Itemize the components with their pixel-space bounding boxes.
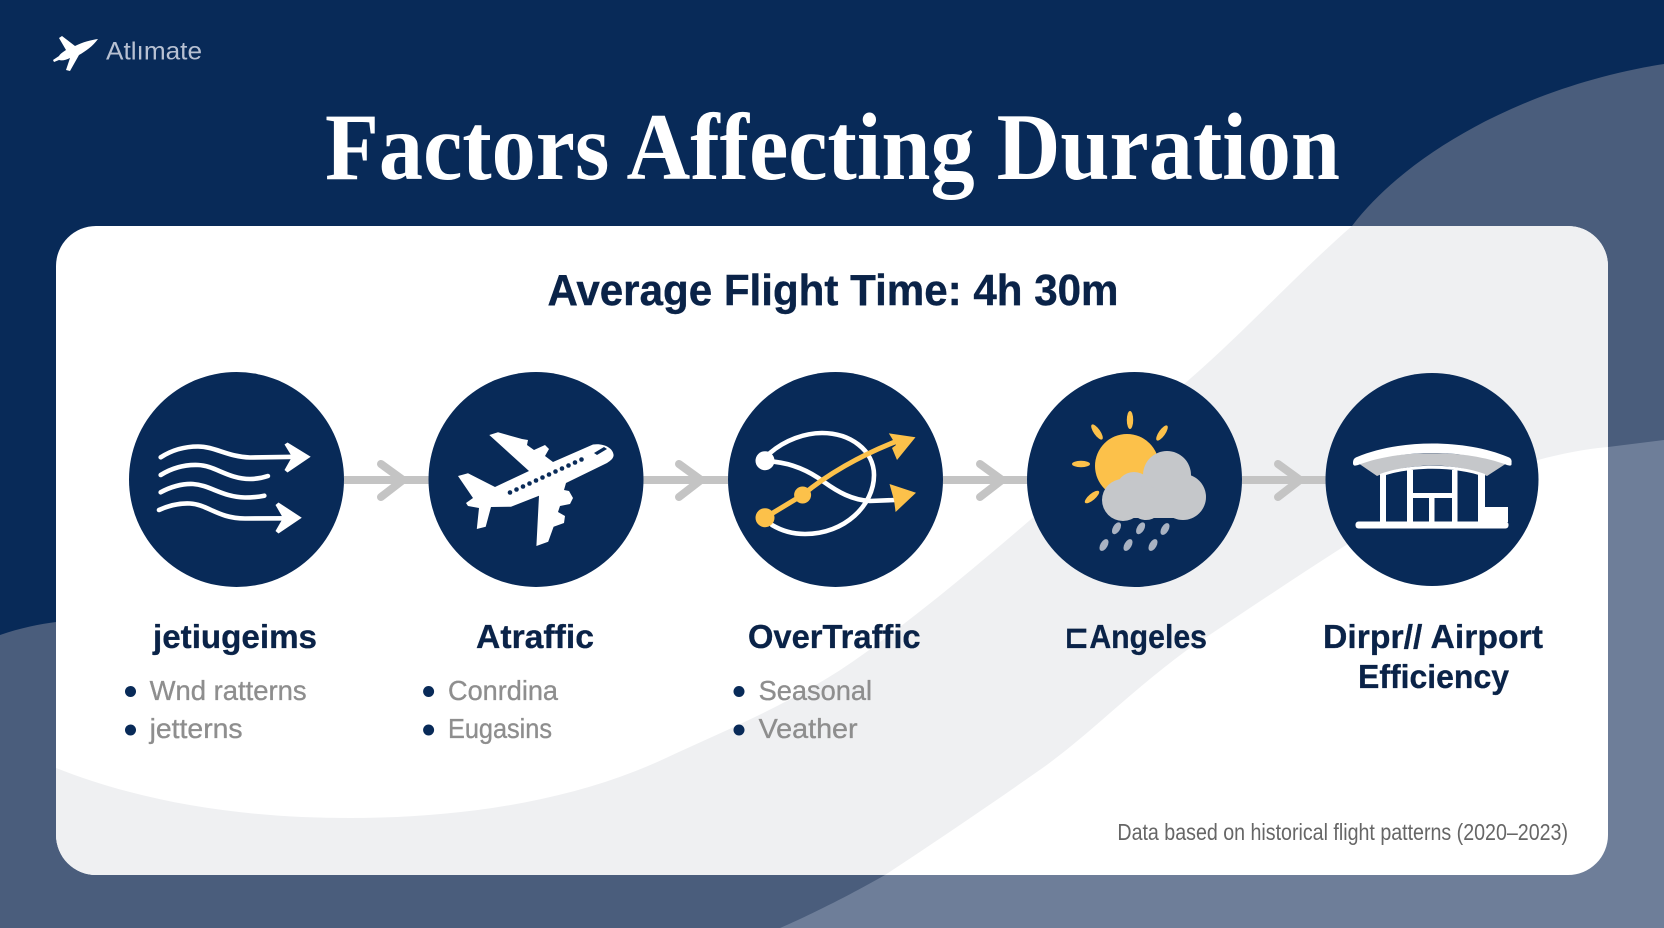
icon: routes circle (728, 372, 943, 587)
heading: column 1: jetiugeims (152, 618, 317, 655)
airplane windows (508, 447, 607, 495)
column 5: heading: Efficiency (1358, 658, 1510, 695)
bullet list: column 3 (734, 675, 872, 744)
bullet list: column 3: Veather (759, 713, 858, 744)
cloud (1102, 451, 1206, 521)
arrow: connector 2 (643, 464, 728, 497)
bullet list: column 2 (423, 675, 558, 744)
arrow: connector 3 (943, 464, 1028, 497)
icon: wind circle (129, 372, 344, 587)
arrow: connector 4 (1242, 464, 1327, 497)
panel: main card (56, 226, 1608, 875)
rain (1098, 521, 1171, 552)
icon: airport terminal circle (1326, 373, 1538, 586)
subtitle: average flight time: Average Flight Time: 4h 30m (548, 266, 1118, 315)
icon: airplane circle (428, 372, 644, 587)
icon: logo plane (53, 36, 98, 71)
bullet list: column 2: Conrdina (448, 675, 558, 706)
heading: column 3: OverTraffic (748, 618, 921, 655)
bullet list: column 1: jetterns (149, 713, 243, 744)
bullet list: column 2: Eugasins (448, 713, 552, 744)
title: Factors Affecting Duration (325, 94, 1340, 200)
column 5: heading (1323, 618, 1543, 695)
icon: weather circle (1027, 372, 1242, 587)
bullet list: column 3: Seasonal (759, 675, 872, 706)
arrow: connector 1 (344, 464, 429, 497)
column 3: heading and list (734, 618, 921, 744)
column 2: heading and list (423, 618, 594, 744)
bullet list: column 1: Wnd ratterns (150, 675, 307, 706)
column 4: heading: ⊏Angeles (1064, 618, 1207, 655)
column 1: heading and list (125, 618, 317, 744)
column 5: heading: Dirpr// Airport (1323, 618, 1543, 655)
heading: column 2: Atraffic (476, 618, 594, 655)
logo (53, 36, 202, 71)
bullet list: column 1 (125, 675, 307, 744)
footnote: Data based on historical flight patterns (2020–2023) (1117, 819, 1568, 845)
logo wordmark: Atlımate (106, 38, 202, 66)
